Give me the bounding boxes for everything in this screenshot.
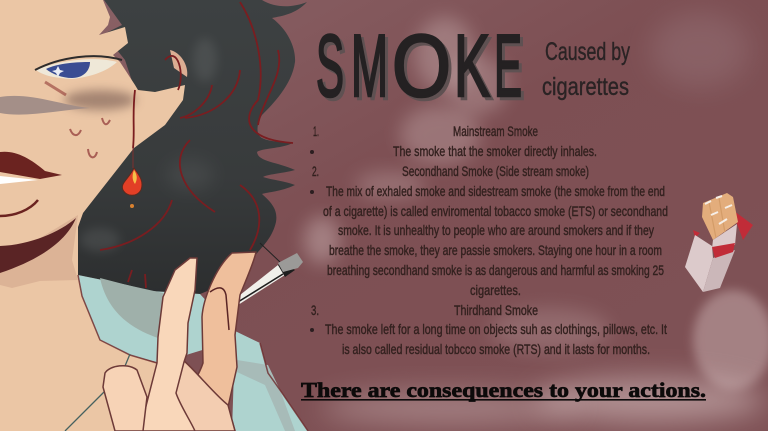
list bullets — [310, 150, 314, 332]
subtitle: caused by cigarettes — [542, 38, 630, 101]
closing statement: There are consequences to your actions. — [301, 378, 706, 402]
item 1: mainstream smoke: The smoke that the smoker directly inhales. — [393, 143, 597, 159]
title: O — [395, 19, 454, 118]
smoke over hair — [80, 38, 217, 252]
earring: flame — [122, 148, 142, 208]
subtitle: caused by cigarettes: cigarettes — [542, 73, 629, 101]
collar: light teal shirt — [78, 275, 308, 431]
item 2: secondhand smoke: Secondhand Smoke (Side stream smoke) — [402, 163, 589, 179]
list numbers: 1. — [313, 123, 319, 139]
item 1: mainstream smoke — [393, 123, 597, 159]
item 3: thirdhand smoke: The smoke left for a long time on objects suh as clothings, pillows, etc. It — [325, 321, 667, 337]
item 2: secondhand smoke: breathe the smoke, they are passie smokers. Staying one hour in a room — [329, 242, 662, 258]
text: E — [497, 19, 525, 118]
title: M — [351, 16, 388, 115]
face and chest skin — [0, 0, 185, 431]
smoke clouds — [304, 12, 768, 424]
lips — [0, 152, 62, 216]
hand: fingers — [103, 252, 256, 431]
title: K — [454, 16, 490, 115]
red hair highlights — [100, 2, 293, 288]
sweat drops — [70, 118, 110, 157]
list numbers: 3. — [311, 302, 319, 318]
illustration: person smoking a cigarette — [0, 0, 308, 431]
neck shadow — [0, 215, 78, 288]
subtitle: caused by cigarettes: Caused by — [545, 38, 630, 66]
list of smoke types — [310, 123, 668, 357]
title: O — [392, 16, 451, 115]
icon: cigarette pack — [685, 193, 753, 292]
item 3: thirdhand smoke: Thirdhand Smoke — [454, 302, 538, 318]
item 3: thirdhand smoke: is also called residual tobcco smoke (RTS) and it lasts for months. — [342, 341, 650, 357]
title: S — [319, 19, 347, 118]
item 2: secondhand smoke: cigarettes. — [470, 282, 521, 298]
item 2: secondhand smoke — [323, 163, 668, 298]
title: M — [354, 19, 391, 118]
title: K — [457, 19, 493, 118]
title: S — [316, 16, 344, 115]
item 3: thirdhand smoke — [325, 302, 667, 357]
collar outline — [78, 275, 308, 431]
hair — [78, 0, 307, 294]
ear — [170, 50, 187, 77]
item 2: secondhand smoke: smoke. It is unhealthy to people who are around smokers and if they — [338, 222, 654, 238]
necklace cord — [65, 354, 130, 431]
title: E — [494, 16, 522, 115]
list numbers: 2. — [312, 163, 319, 179]
jaw shadow — [0, 218, 76, 273]
cigarette — [238, 243, 303, 305]
eye — [35, 56, 136, 110]
title — [316, 16, 525, 118]
collar shadow — [100, 278, 163, 338]
scar mark under the eye — [0, 96, 90, 115]
list numbers — [311, 123, 319, 318]
item 1: mainstream smoke: Mainstream Smoke — [453, 123, 538, 139]
